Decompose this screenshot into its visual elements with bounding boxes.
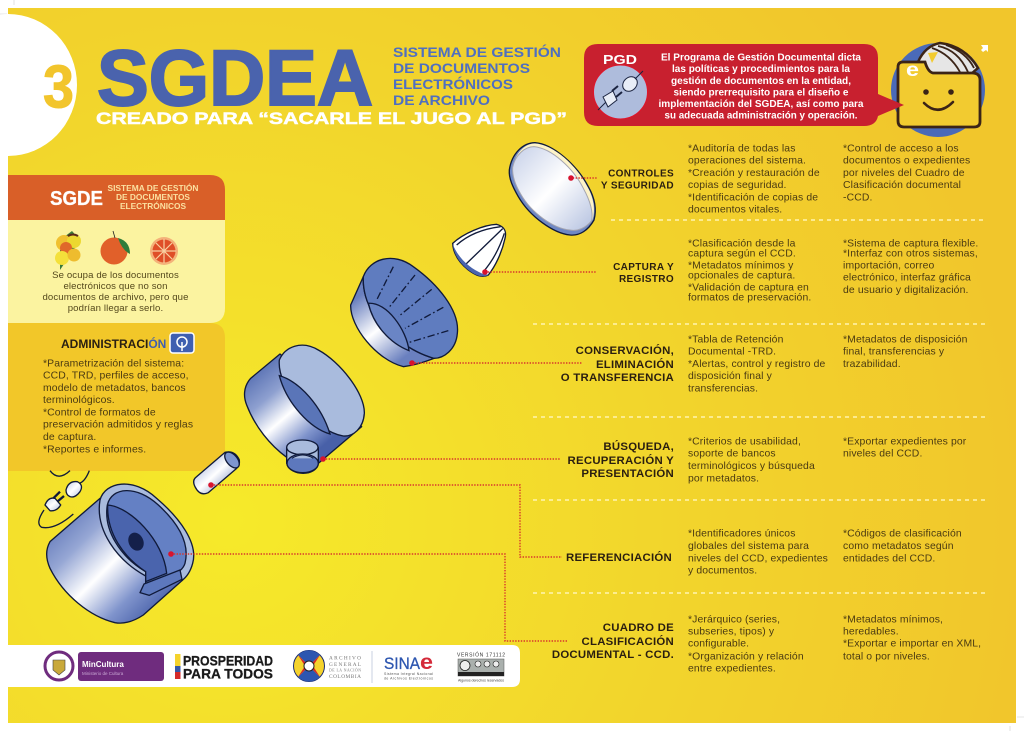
icon: plug and cable — [39, 471, 89, 528]
logo: Archivo General: COLOMBIA — [329, 674, 361, 680]
row: conservación — [561, 334, 968, 394]
icon: administration — [170, 333, 194, 353]
title: CREADO PARA “SACARLE EL JUGO AL PGD” — [96, 109, 567, 128]
row: referenciación: globales del sistema para — [688, 541, 809, 552]
logo: Archivo General — [294, 650, 361, 682]
panel: administración: *Control de formatos de — [43, 408, 156, 418]
panel: SGDE: ELECTRÓNICOS — [120, 200, 186, 211]
callout: PGD: gestión de documentos en la entidad, — [671, 76, 851, 87]
row: cuadro de clasificación: heredables. — [843, 626, 899, 638]
icon: plug — [594, 65, 648, 119]
row: referenciación: REFERENCIACIÓN — [566, 551, 672, 564]
subtitle: ELECTRÓNICOS — [393, 75, 513, 92]
panel: SGDE: SGDE — [50, 188, 103, 210]
row: captura y registro: REGISTRO — [619, 274, 674, 285]
logo: SINAE: SINA — [384, 654, 421, 673]
row: cuadro de clasificación: *Jerárquico (series, — [688, 614, 780, 626]
logo: MinCultura: MinCultura — [82, 660, 124, 669]
row: captura y registro: formatos de preservación. — [688, 292, 811, 304]
row: controles y seguridad: documentos vitales. — [688, 204, 782, 216]
callout: PGD: su adecuada administración y operación. — [664, 110, 858, 122]
logo: Prosperidad para todos: PARA TODOS — [183, 666, 273, 682]
row: cuadro de clasificación: CLASIFICACIÓN — [582, 635, 674, 648]
callout: PGD: PGD — [603, 53, 637, 67]
exploded device: cone — [453, 224, 506, 276]
row: cuadro de clasificación: *Organización y relación — [688, 652, 804, 662]
logo: Archivo General: ARCHIVO — [329, 656, 361, 662]
logo: SINAE — [384, 651, 433, 680]
panel: administración: *Reportes e informes. — [43, 444, 146, 456]
row: referenciación: y documentos. — [688, 566, 757, 576]
logo: SINAE: de Archivos Electrónicos — [384, 676, 433, 680]
row: referenciación: niveles del CCD, expedientes — [688, 554, 828, 564]
row: controles y seguridad: -CCD. — [843, 192, 873, 204]
row: captura y registro: *Validación de captura en — [688, 282, 809, 294]
row: búsqueda: terminológicos y búsqueda — [688, 461, 815, 472]
logo: Prosperidad para todos — [175, 654, 273, 682]
row: búsqueda: por metadatos. — [688, 474, 759, 484]
row: conservación: transferencias. — [688, 384, 758, 394]
row: conservación: Documental -TRD. — [688, 346, 776, 358]
row: búsqueda: niveles del CCD. — [843, 448, 922, 460]
row: captura y registro: de usuario y digitalización. — [843, 285, 969, 296]
logo: Archivo General: DE LA NACIÓN — [329, 668, 361, 672]
logo: Prosperidad para todos: PROSPERIDAD — [183, 654, 273, 668]
row: cuadro de clasificación: CUADRO DE — [603, 622, 674, 634]
logo: MinCultura — [45, 652, 164, 681]
row: cuadro de clasificación: *Exportar e importar en XML, — [843, 638, 981, 650]
panel: SGDE: documentos de archivo, pero que — [42, 292, 189, 303]
row: captura y registro: importación, correo — [843, 260, 934, 272]
row: controles y seguridad: *Creación y restauración de — [688, 168, 820, 179]
callout: PGD — [584, 44, 904, 126]
subtitle — [393, 43, 561, 108]
panel: administración: modelo de metadatos, bancos — [43, 383, 186, 394]
row: controles y seguridad: documentos o expedientes — [843, 156, 970, 166]
logo: SINAE: Sistema Integral Nacional — [384, 672, 433, 676]
row: captura y registro: opcionales de captura. — [688, 270, 795, 282]
row: búsqueda — [568, 436, 967, 484]
row: búsqueda: RECUPERACIÓN Y — [568, 454, 674, 467]
row: búsqueda: BÚSQUEDA, — [603, 440, 674, 453]
row: captura y registro: *Sistema de captura flexible. — [843, 238, 978, 250]
row: conservación: trazabilidad. — [843, 359, 901, 370]
row: controles y seguridad: CONTROLES — [608, 168, 674, 180]
row: conservación: *Metadatos de disposición — [843, 334, 968, 346]
callout: PGD: las políticas y procedimientos para la — [672, 64, 850, 75]
icon: folder mascot — [891, 43, 985, 137]
row: controles y seguridad: copias de seguridad. — [688, 180, 786, 191]
row: captura y registro: electrónico, interfaz gráfica — [843, 272, 971, 284]
row: controles y seguridad: Clasificación documental — [843, 180, 961, 191]
title — [96, 33, 567, 128]
row: cuadro de clasificación: configurable. — [688, 638, 749, 650]
panel: SGDE: electrónicos que no son — [63, 281, 168, 292]
logo: Archivo General: GENERAL — [329, 662, 361, 668]
row: cuadro de clasificación: total o por niveles. — [843, 652, 930, 662]
exploded device: strainer — [351, 258, 458, 367]
row: búsqueda: PRESENTACIÓN — [581, 467, 674, 480]
connector lines — [168, 175, 597, 641]
icon: orange — [100, 231, 130, 264]
panel: SGDE: SISTEMA DE GESTIÓN — [108, 182, 198, 193]
callout: PGD: siendo prerrequisito para el diseño e — [674, 88, 849, 98]
row: conservación: *Tabla de Retención — [688, 334, 784, 346]
panel: SGDE: podrían llegar a serlo. — [68, 303, 163, 314]
row: conservación: final, transferencias y — [843, 346, 945, 358]
panel: SGDE: DE DOCUMENTOS — [116, 192, 190, 202]
row: cuadro de clasificación: DOCUMENTAL - CCD. — [552, 649, 674, 661]
callout: PGD: El Programa de Gestión Documental dicta — [661, 52, 861, 64]
panel: administración: de captura. — [43, 432, 96, 443]
row: referenciación: como metadatos según — [843, 541, 954, 552]
panel: administración: CCD, TRD, perfiles de acceso, — [43, 370, 189, 382]
panel: administración: *Parametrización del sistema: — [43, 358, 184, 370]
row: conservación: CONSERVACIÓN, — [576, 344, 674, 357]
row: captura y registro: *Interfaz con otros sistemas, — [843, 248, 978, 260]
panel: SGDE — [8, 175, 225, 323]
panel: administración — [8, 323, 225, 471]
row: captura y registro: *Clasificación desde la — [688, 238, 796, 250]
exploded device: base — [47, 484, 194, 623]
row: referenciación: entidades del CCD. — [843, 554, 935, 564]
row: referenciación: *Identificadores únicos — [688, 528, 796, 540]
logo: creative commons: VERSIÓN 171112 — [457, 652, 505, 658]
row: cuadro de clasificación — [552, 614, 981, 674]
subtitle: SISTEMA DE GESTIÓN — [393, 43, 561, 60]
row: cuadro de clasificación: subseries, tipos) y — [688, 626, 775, 638]
row: conservación: ELIMINACIÓN — [596, 358, 674, 371]
row: controles y seguridad: *Identificación de copias de — [688, 192, 818, 204]
icon: fruit cluster — [55, 231, 81, 270]
row: búsqueda: *Exportar expedientes por — [843, 436, 967, 448]
logo: SINAE: e — [420, 651, 433, 674]
title: SGDEA — [97, 33, 373, 122]
logo: MinCultura: Ministerio de Cultura — [82, 671, 124, 676]
logo: creative commons — [457, 652, 505, 682]
row: controles y seguridad: *Auditoría de todas las — [688, 144, 796, 154]
panel: administración: terminológicos. — [43, 395, 115, 406]
logo: creative commons: Algunos derechos reservados — [458, 678, 504, 682]
row: referenciación: *Códigos de clasificación — [843, 528, 962, 540]
row: búsqueda: *Criterios de usabilidad, — [688, 436, 801, 448]
row: captura y registro — [613, 238, 978, 304]
row: captura y registro: captura según el CCD. — [688, 248, 796, 260]
icon: folder mascot: e — [906, 60, 919, 81]
subtitle: DE ARCHIVO — [393, 92, 490, 108]
exploded device: tube — [194, 449, 242, 494]
row: referenciación — [566, 528, 962, 576]
row: controles y seguridad: *Control de acceso a los — [843, 144, 959, 154]
panel: administración: ADMINISTRACIÓN — [61, 336, 166, 351]
row: conservación: *Alertas, control y registro de — [688, 359, 826, 370]
row: controles y seguridad: operaciones del sistema. — [688, 156, 806, 166]
subtitle: DE DOCUMENTOS — [393, 60, 530, 76]
row: conservación: O TRANSFERENCIA — [561, 372, 674, 384]
number badge — [0, 14, 77, 156]
icon: orange slice — [150, 237, 178, 265]
icon: small arrow — [981, 45, 988, 52]
logo strip — [8, 645, 520, 687]
row: controles y seguridad: Y SEGURIDAD — [601, 180, 674, 192]
panel: administración: preservación admitidos y reglas — [43, 420, 193, 430]
row: cuadro de clasificación: entre expedientes. — [688, 664, 776, 674]
callout: PGD: implementación del SGDEA, así como para — [658, 99, 864, 110]
row: captura y registro: CAPTURA Y — [613, 262, 674, 273]
row: búsqueda: soporte de bancos — [688, 448, 776, 460]
exploded device: cylinder — [245, 345, 364, 473]
row: controles y seguridad: por niveles del Cuadro de — [843, 168, 965, 179]
exploded device: dish — [509, 143, 595, 235]
number badge: 3 — [43, 54, 74, 120]
row: cuadro de clasificación: *Metadatos mínimos, — [843, 614, 943, 626]
row: conservación: disposición final y — [688, 371, 773, 382]
row: captura y registro: *Metadatos mínimos y — [688, 260, 794, 272]
row: controles y seguridad — [601, 144, 970, 216]
panel: SGDE: Se ocupa de los documentos — [52, 270, 179, 281]
